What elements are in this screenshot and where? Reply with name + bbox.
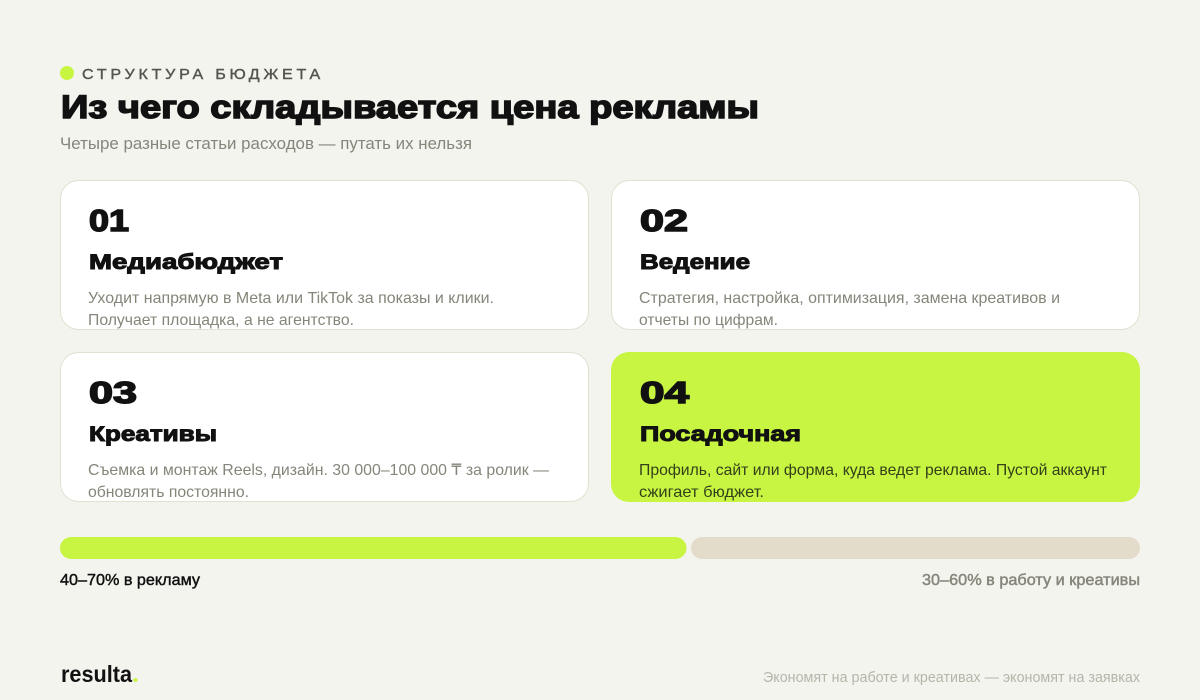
card heading: Медиабюджет (89, 251, 283, 274)
card description (88, 290, 494, 329)
card description: Получает площадка, а не агентство. (88, 312, 354, 329)
budget split bar (60, 537, 1140, 559)
panel: card 01 media budget (60, 180, 588, 330)
number 01: 01 (89, 203, 129, 238)
card description: Стратегия, настройка, оптимизация, замена креативов и (639, 290, 1060, 307)
bar label: advertising share: 40–70% в рекламу (60, 572, 200, 589)
subtitle: Четыре разные статьи расходов — путать их нельзя (60, 134, 472, 153)
title: Из чего складывается цена рекламы (61, 89, 759, 125)
eyebrow label: СТРУКТУРА БЮДЖЕТА (82, 66, 324, 83)
number 03: 03 (89, 375, 137, 410)
number 04: 04 (640, 375, 690, 410)
panel: card 02 management (612, 180, 1140, 330)
bar label: work and creatives share: 30–60% в работу и креативы (922, 572, 1140, 589)
card description: Съемка и монтаж Reels, дизайн. 30 000–100 000 ₸ за ролик — (88, 462, 549, 479)
card description: Уходит напрямую в Meta или TikTok за показы и клики. (88, 290, 494, 307)
card heading: Креативы (89, 423, 217, 446)
panel: card 03 creatives (60, 352, 588, 502)
card description: сжигает бюджет. (639, 484, 764, 501)
number 02: 02 (640, 203, 688, 238)
card description (639, 290, 1060, 329)
card description (88, 463, 549, 497)
card description: обновлять постоянно. (88, 484, 249, 501)
card description: Профиль, сайт или форма, куда ведет реклама. Пустой аккаунт (639, 462, 1108, 479)
panel: card 04 landing highlighted (611, 352, 1140, 502)
footer note: Экономят на работе и креативах — экономят на заявках (763, 669, 1140, 686)
bar segment: work and creatives (691, 537, 1140, 559)
logo: resulta (61, 661, 132, 687)
card heading: Посадочная (640, 423, 801, 446)
card description (639, 462, 1108, 501)
card description: отчеты по цифрам. (639, 312, 778, 329)
bar segment: advertising (60, 537, 686, 559)
card heading: Ведение (640, 251, 750, 274)
